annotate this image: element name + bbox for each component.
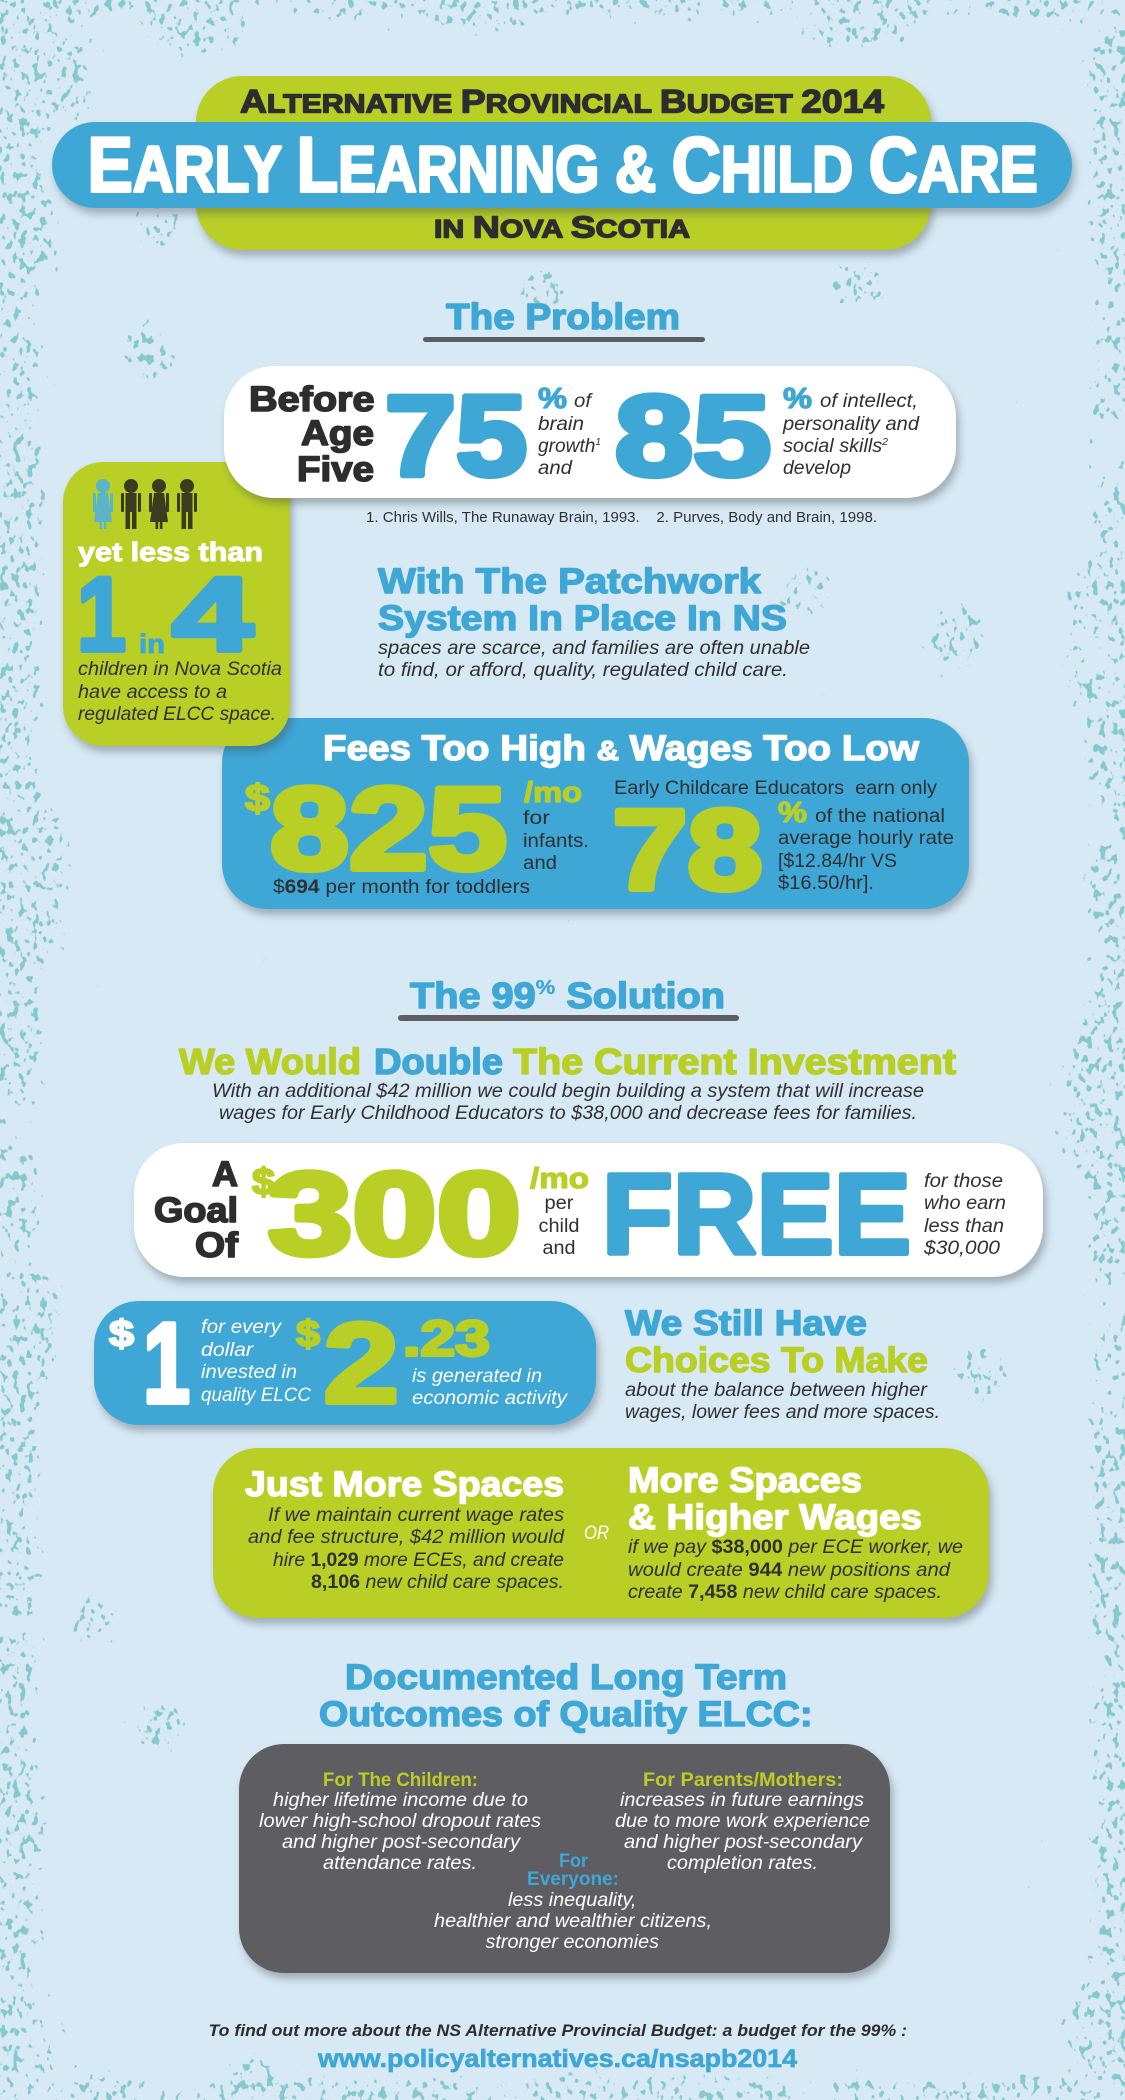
text: children with access: have access to a [78, 681, 227, 703]
text: yet less than: yet less than [78, 537, 263, 567]
text block: additional investment [212, 1080, 924, 1124]
option: more spaces and higher wages: create 7,458 new child care spaces. [628, 1581, 942, 1603]
statistic: 2.23 dollars: .23 [403, 1310, 490, 1366]
statistic: 75 percent: and [538, 458, 574, 479]
icon: four children [93, 479, 197, 529]
statistic: 300 per month: and [542, 1238, 576, 1259]
statistic: 825 per month [245, 763, 589, 898]
statistic: 1 dollar: dollar [201, 1340, 254, 1361]
label: a goal of [154, 1155, 238, 1265]
label: a goal of: Goal [154, 1191, 238, 1230]
text block: we still have choices [625, 1304, 940, 1423]
label: before age five: Before [249, 380, 374, 419]
statistic: 85 percent [615, 373, 920, 500]
column: for the children: attendance rates. [323, 1852, 477, 1874]
column: for parents and mothers: completion rates. [667, 1852, 818, 1874]
footnote sources: 1. Chris Wills, The Runaway Brain, 1993. 2. Purves, Body and Brain, 1998. [366, 510, 877, 526]
statistic: 300 per month: child [538, 1216, 580, 1237]
text: children with access [78, 658, 282, 725]
statistic: 85 percent: % [783, 383, 812, 415]
statistic: 85 percent: social skills [783, 436, 878, 457]
statistic: 300 per month [252, 1148, 589, 1279]
section heading: the 99% solution: Solution [555, 975, 725, 1016]
statistic: 2.23 dollars [296, 1300, 569, 1428]
statistic: 75 percent [385, 373, 601, 500]
text block: we still have choices: about the balance between higher [625, 1379, 929, 1401]
text: children with access: regulated ELCC space. [78, 703, 276, 725]
statistic: free: FREE [602, 1152, 911, 1278]
statistic: 1 dollar: $ [109, 1313, 135, 1354]
column: for parents and mothers: For Parents/Mothers: [643, 1770, 843, 1791]
panel: before age five [224, 366, 956, 500]
subtitle: in nova scotia: IN NOVA SCOTIA [434, 210, 690, 244]
statistic: 825 per month: $ [245, 778, 270, 820]
option: just more spaces: and fee structure, $42 million would [248, 1526, 565, 1548]
heading: double the current investment: We Would [179, 1041, 361, 1082]
statistic: 300 per month: /mo [530, 1163, 589, 1195]
statistic: 78 percent: Early Childcare Educators earn only [614, 778, 938, 799]
statistic: 1 dollar: 1 [143, 1300, 190, 1428]
column: for the children: lower high-school dropout rates [259, 1810, 541, 1832]
label: before age five: Age [301, 414, 374, 453]
section heading: the 99% solution: The 99 [410, 975, 524, 1016]
statistic: 78 percent: % [778, 797, 807, 829]
column: for the children: For The Children: [323, 1770, 478, 1791]
text block: we still have choices: wages, lower fees and more spaces. [625, 1401, 940, 1423]
statistic: 2.23 dollars: is generated in [412, 1366, 542, 1387]
statistic: 75 percent: 75 [385, 373, 527, 500]
label: before age five [249, 380, 374, 489]
statistic: 1 dollar: invested in [201, 1362, 297, 1383]
statistic: 85 percent: 2 [881, 437, 888, 448]
statistic: 85 percent: 85 [615, 373, 771, 500]
column: for parents and mothers: increases in future earnings [620, 1789, 864, 1811]
statistic: 1 in 4 [77, 556, 253, 674]
statistic: 78 percent: $16.50/hr]. [778, 873, 874, 894]
statistic: free: less than [924, 1216, 1004, 1237]
column: for everyone [434, 1851, 712, 1953]
option: just more spaces: Just More Spaces [245, 1465, 564, 1504]
statistic: 85 percent: personality and [782, 414, 920, 435]
heading: documented long term outcomes: Documented Long Term [345, 1658, 787, 1697]
column: for parents and mothers [615, 1770, 870, 1874]
column: for everyone: For [559, 1851, 589, 1872]
statistic: 78 percent: average hourly rate [778, 828, 954, 849]
statistic: 75 percent: growth [538, 436, 595, 457]
text block: we still have choices: We Still Have [625, 1304, 867, 1343]
heading: double the current investment [179, 1041, 956, 1082]
title banner [52, 76, 1072, 250]
statistic: 75 percent: of [574, 391, 593, 412]
section heading: the 99% solution: % [536, 977, 556, 999]
option: more spaces and higher wages: if we pay $38,000 per ECE worker, we [628, 1536, 963, 1558]
text block: additional investment: wages for Early Childhood Educators to $38,000 and decrease fees for families. [219, 1102, 917, 1124]
footer link: www.policyalternatives.ca/nsapb2014 [317, 2045, 797, 2073]
statistic: 78 percent: 78 [612, 787, 762, 914]
statistic: free: for those [924, 1171, 1003, 1192]
statistic: 300 per month: per [544, 1193, 574, 1214]
heading: documented long term outcomes: Outcomes of Quality ELCC: [319, 1695, 812, 1734]
column: for everyone: less inequality, [508, 1889, 636, 1911]
statistic: 825 per month: 825 [270, 763, 507, 894]
heading: double the current investment: The Current Investment [513, 1041, 956, 1082]
statistic: 825 per month: $694 per month for toddlers [273, 877, 530, 898]
column: for everyone: Everyone: [527, 1869, 619, 1890]
label: a goal of: A [212, 1155, 238, 1194]
statistic: 825 per month: and [523, 853, 557, 874]
statistic: 2.23 dollars: 2 [324, 1300, 399, 1428]
panel: outcomes [239, 1744, 890, 1973]
section heading: the problem: The Problem [446, 296, 680, 337]
statistic: 825 per month: for [523, 808, 551, 829]
heading: double the current investment: Double [374, 1041, 503, 1082]
statistic: 1 dollar [109, 1300, 311, 1428]
text block: patchwork system: to find, or afford, quality, regulated child care. [378, 659, 788, 681]
statistic: 75 percent: brain [538, 414, 584, 435]
text: children with access: children in Nova Scotia [78, 658, 282, 680]
column: for everyone: healthier and wealthier citizens, [434, 1910, 712, 1932]
label: before age five: Five [297, 450, 374, 489]
label: a goal of: Of [195, 1226, 238, 1265]
text block: patchwork system: spaces are scarce, and families are often unable [378, 637, 810, 659]
green title pill [196, 76, 931, 250]
panel heading: Fees Too High & Wages Too Low [323, 729, 920, 768]
option: more spaces and higher wages: More Spaces [628, 1461, 862, 1500]
statistic: 78 percent: [$12.84/hr VS [778, 851, 897, 872]
text block: we still have choices: Choices To Make [625, 1341, 928, 1380]
column: for the children [259, 1770, 541, 1874]
option: just more spaces: If we maintain current wage rates [268, 1504, 564, 1526]
option: just more spaces: 8,106 new child care spaces. [311, 1571, 564, 1593]
text block: patchwork system [378, 562, 810, 681]
statistic: 78 percent [612, 778, 954, 914]
column: for parents and mothers: and higher post-secondary [624, 1831, 863, 1853]
text block: additional investment: With an additional $42 million we could begin building a system that will increase [212, 1080, 924, 1102]
statistic: 2.23 dollars: $ [296, 1313, 320, 1354]
option: more spaces and higher wages: & Higher Wages [628, 1498, 922, 1537]
statistic: 1 dollar: for every [201, 1317, 283, 1338]
text: or: OR [584, 1523, 609, 1544]
statistic: 75 percent: % [538, 383, 567, 415]
statistic: 300 per month: 300 [268, 1148, 521, 1279]
section heading: the problem [423, 296, 705, 342]
option: just more spaces [245, 1465, 565, 1593]
statistic: 300 per month: $ [252, 1161, 275, 1202]
text block: patchwork system: With The Patchwork [378, 562, 762, 601]
statistic: 85 percent: develop [783, 458, 851, 479]
column: for everyone: stronger economies [486, 1931, 659, 1953]
panel: return on investment [94, 1300, 596, 1428]
footer text: To find out more about the NS Alternative Provincial Budget: a budget for the 99% : [208, 2021, 907, 2040]
statistic: free: $30,000 [923, 1238, 1000, 1259]
statistic: 1 in 4: in [139, 629, 165, 659]
statistic: 75 percent: 1 [595, 437, 601, 448]
main title: EARLY LEARNING & CHILD CARE [88, 120, 1038, 208]
statistic: 1 in 4: 4 [172, 556, 253, 674]
panel: choices comparison [213, 1448, 989, 1618]
panel: fees too high and wages too low [222, 718, 969, 914]
statistic: 85 percent: of intellect, [820, 391, 918, 412]
statistic: 1 dollar: quality ELCC [201, 1385, 311, 1406]
statistic: 78 percent: of the national [815, 806, 945, 827]
statistic: 825 per month: infants. [523, 831, 589, 852]
statistic: free: who earn [924, 1193, 1006, 1214]
section heading: the 99% solution [398, 975, 739, 1021]
statistic: 825 per month: /mo [524, 777, 582, 809]
blue title pill [52, 122, 1072, 208]
option: just more spaces: hire 1,029 more ECEs, and create [273, 1549, 564, 1571]
statistic: 2.23 dollars: economic activity [412, 1388, 569, 1409]
heading: alternative provincial budget: ALTERNATIVE PROVINCIAL BUDGET 2014 [240, 84, 884, 120]
panel: yet less than 1 in 4 [63, 462, 290, 746]
option: more spaces and higher wages [628, 1461, 963, 1603]
option: more spaces and higher wages: would create 944 new positions and [628, 1559, 951, 1581]
heading: documented long term outcomes [319, 1658, 812, 1734]
text block: patchwork system: System In Place In NS [378, 599, 787, 638]
statistic: 1 in 4: 1 [77, 556, 126, 674]
column: for parents and mothers: due to more work experience [615, 1810, 870, 1832]
column: for the children: and higher post-secondary [282, 1831, 521, 1853]
panel: a goal of [134, 1143, 1043, 1279]
column: for the children: higher lifetime income due to [273, 1789, 528, 1811]
